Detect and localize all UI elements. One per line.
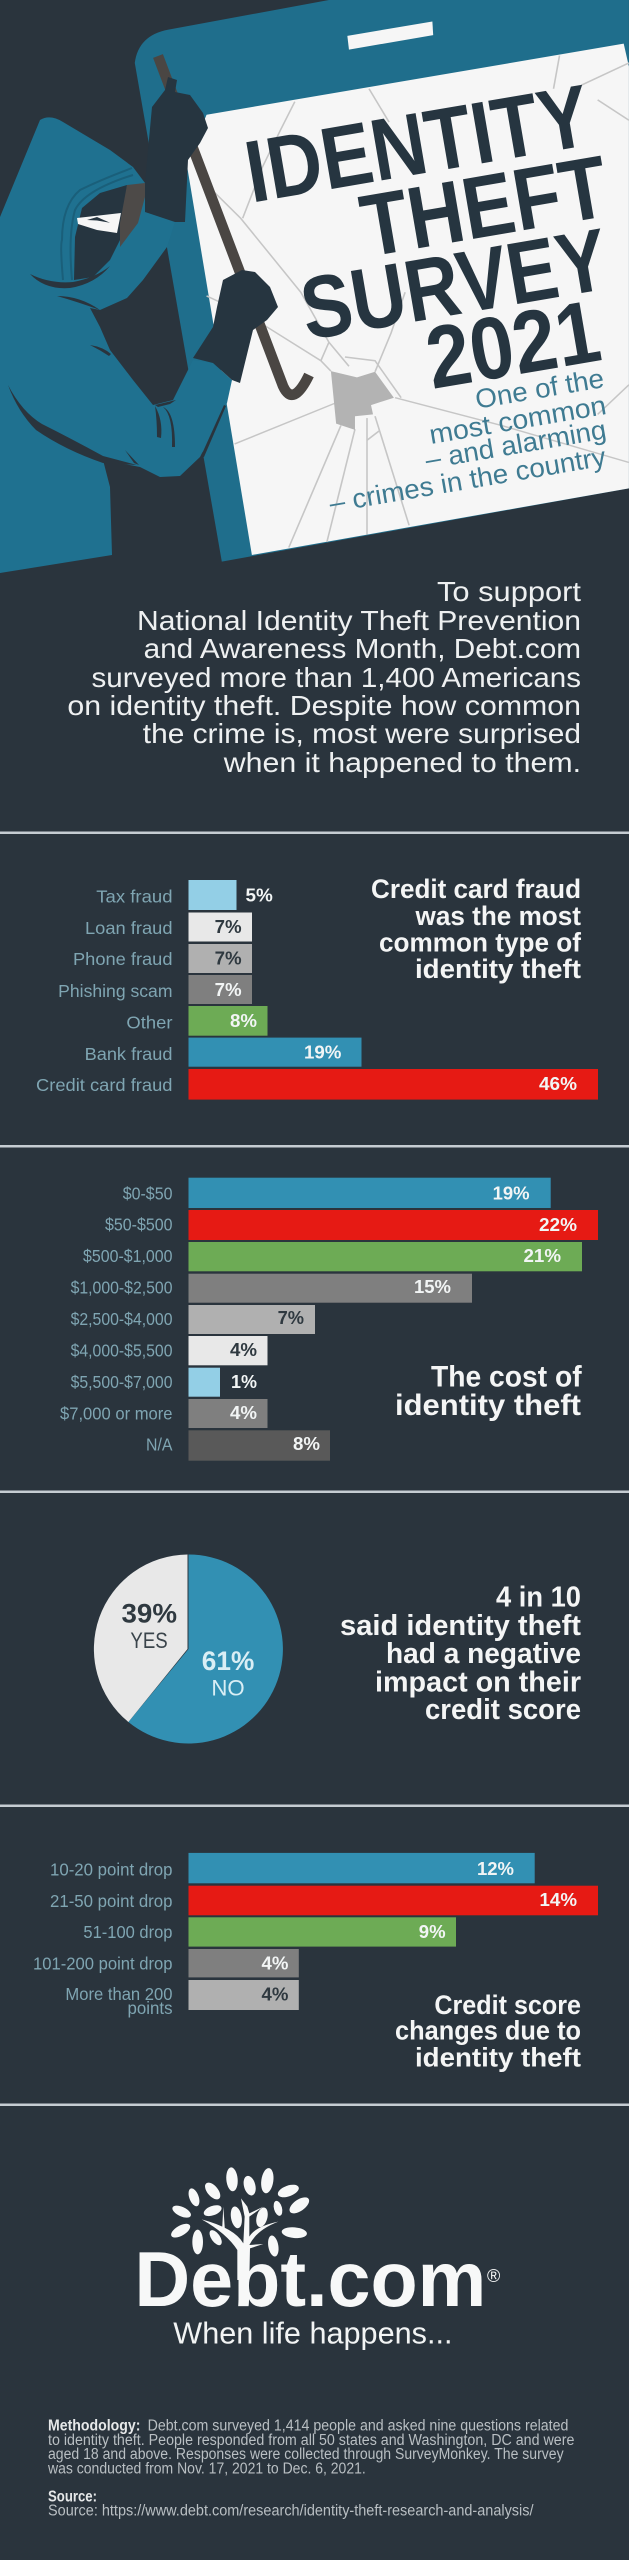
bar: 101-200 point drop 4% xyxy=(33,1949,299,1977)
bar: credit card fraud 46% xyxy=(36,1069,598,1100)
heading: the cost of identity theft xyxy=(395,1361,583,1422)
intro text: the crime is, most were surprised xyxy=(143,718,581,749)
bar: $50-$500 22%: $50-$500 xyxy=(105,1215,173,1235)
bar: N/A 8% xyxy=(146,1430,330,1461)
bar: bank fraud 19%: Bank fraud xyxy=(85,1044,172,1064)
screen cracks xyxy=(207,55,629,548)
heading: credit card fraud: identity theft xyxy=(415,954,581,984)
phone body xyxy=(135,0,629,562)
bar: loan fraud 7%: 7% xyxy=(215,916,242,937)
bar: other 8% xyxy=(126,1006,268,1036)
panel: type of identity theft xyxy=(36,874,598,1100)
bar: $5,500-$7,000 1% xyxy=(71,1368,257,1397)
heading: credit card fraud: was the most xyxy=(415,901,581,931)
hood inner lining xyxy=(120,183,145,247)
methodology: Debt.com surveyed 1,414 people and asked nine questions related xyxy=(148,2418,568,2435)
methodology: to identity theft. People responded from all 50 states and Washington, DC and were xyxy=(48,2432,574,2449)
bar: $500-$1,000 21% xyxy=(83,1242,582,1271)
heading: credit score changes xyxy=(395,1990,581,2072)
bar: loan fraud 7%: Loan fraud xyxy=(85,918,172,938)
phone screen xyxy=(187,44,629,555)
bar: $500-$1,000 21%: $500-$1,000 xyxy=(83,1246,173,1266)
bar: phishing scam 7%: 7% xyxy=(215,979,242,1000)
bar: $2,500-$4,000 7% xyxy=(71,1305,315,1334)
bar: 21-50 point drop 14%: 21-50 point drop xyxy=(50,1891,172,1911)
heading: 4 in 10 xyxy=(340,1582,581,1726)
panel: footer xyxy=(47,2167,574,2520)
methodology: was conducted from Nov. 17, 2021 to Dec. 6, 2021. xyxy=(47,2460,366,2477)
panel: credit score changes xyxy=(33,1853,598,2072)
lower glove xyxy=(193,270,278,383)
bar: phishing scam 7% xyxy=(58,975,252,1004)
bar: loan fraud 7% xyxy=(85,912,252,942)
heading: credit card fraud: common type of xyxy=(379,928,582,958)
bar: more than 200 points 4%: points xyxy=(128,1998,173,2018)
bar: $5,500-$7,000 1%: $5,500-$7,000 xyxy=(71,1372,173,1392)
heading: credit score changes: changes due to xyxy=(395,2016,581,2046)
bar: $1,000-$2,500 15% xyxy=(71,1274,472,1303)
source xyxy=(48,2489,534,2520)
heading: credit score changes: Credit score xyxy=(434,1990,581,2020)
bar: more than 200 points 4%: 4% xyxy=(262,1984,288,2005)
title: 2021 xyxy=(419,281,607,408)
bar: 51-100 drop 9%: 9% xyxy=(419,1921,446,1942)
subtitle: most common xyxy=(427,390,608,450)
pie label: no: NO xyxy=(211,1676,245,1700)
bar: $500-$1,000 21%: 21% xyxy=(524,1245,561,1266)
heading: 4 in 10: impact on their xyxy=(375,1666,581,1698)
screen hole xyxy=(331,371,394,430)
bar: credit card fraud 46%: 46% xyxy=(539,1073,577,1094)
bar: $50-$500 22% xyxy=(105,1210,598,1240)
phone speaker slot xyxy=(347,21,433,50)
bar: $1,000-$2,500 15%: $1,000-$2,500 xyxy=(71,1278,173,1298)
illustration: broken phone and thief xyxy=(0,0,629,573)
heading: credit card fraud: Credit card fraud xyxy=(371,874,581,904)
intro text: and Awareness Month, Debt.com xyxy=(144,633,581,664)
bar: $2,500-$4,000 7%: $2,500-$4,000 xyxy=(71,1309,173,1329)
bar: more than 200 points 4%: More than 200 xyxy=(65,1984,173,2004)
bar: 10-20 point drop 12%: 10-20 point drop xyxy=(50,1859,172,1879)
heading: the cost of identity theft: identity theft xyxy=(395,1389,581,1422)
bar: phone fraud 7%: Phone fraud xyxy=(73,949,172,969)
heading: 4 in 10: said identity theft xyxy=(340,1610,581,1642)
intro text xyxy=(67,576,581,778)
pie chart xyxy=(94,1554,283,1743)
source: Source: https://www.debt.com/research/identity-theft-research-and-analysis/ xyxy=(48,2503,534,2520)
upper glove xyxy=(145,77,208,222)
tagline: When life happens... xyxy=(173,2315,453,2350)
bar: $5,500-$7,000 1%: 1% xyxy=(231,1371,257,1392)
bar: phone fraud 7% xyxy=(73,944,252,973)
bar: $1,000-$2,500 15%: 15% xyxy=(414,1276,451,1297)
bar: $7,000 or more 4% xyxy=(60,1399,268,1428)
heading: 4 in 10: had a negative xyxy=(386,1638,581,1670)
intro text: surveyed more than 1,400 Americans xyxy=(92,662,581,693)
bar: $0-$50 19%: 19% xyxy=(493,1182,530,1203)
icon: tree xyxy=(169,2167,312,2280)
bar: other 8%: 8% xyxy=(230,1010,257,1031)
bar: 10-20 point drop 12%: 12% xyxy=(477,1858,514,1879)
bar: N/A 8%: 8% xyxy=(293,1433,320,1454)
intro text: on identity theft. Despite how common xyxy=(67,690,581,721)
thief face mask xyxy=(74,185,127,280)
bar: $0-$50 19% xyxy=(123,1178,551,1208)
heading: the cost of identity theft: The cost of xyxy=(431,1361,583,1394)
bar: 21-50 point drop 14%: 14% xyxy=(540,1889,577,1910)
pie label: yes: YES xyxy=(130,1628,168,1653)
bar: 10-20 point drop 12% xyxy=(50,1853,535,1883)
eye slit xyxy=(87,217,110,223)
bar: tax fraud 5%: 5% xyxy=(246,884,273,905)
subtitle xyxy=(327,363,609,518)
bar: bank fraud 19%: 19% xyxy=(304,1042,341,1063)
methodology: Methodology: xyxy=(48,2418,140,2435)
intro text: To support xyxy=(437,576,581,607)
bar: 51-100 drop 9% xyxy=(83,1917,456,1947)
crowbar xyxy=(158,56,309,395)
methodology: aged 18 and above. Responses were collected through SurveyMonkey. The survey xyxy=(48,2446,564,2463)
subtitle: One of the xyxy=(473,363,606,415)
bar: tax fraud 5%: Tax fraud xyxy=(96,886,172,906)
bar: 21-50 point drop 14% xyxy=(50,1886,598,1915)
bar: other 8%: Other xyxy=(126,1012,173,1032)
pie label: yes: 39% xyxy=(122,1598,177,1628)
intro text: National Identity Theft Prevention xyxy=(137,605,581,636)
bar: $4,000-$5,500 4% xyxy=(71,1336,267,1365)
intro text: when it happened to them. xyxy=(223,747,581,778)
bar: $7,000 or more 4%: $7,000 or more xyxy=(60,1403,172,1423)
pie label: no: 61% xyxy=(202,1646,254,1676)
panel: cost of identity theft xyxy=(60,1178,598,1461)
heading: credit card fraud xyxy=(371,874,582,984)
bar: bank fraud 19% xyxy=(85,1038,361,1067)
bar: credit card fraud 46%: Credit card fraud xyxy=(36,1075,172,1095)
methodology xyxy=(47,2418,574,2477)
subtitle: – crimes in the country xyxy=(327,441,609,518)
logo xyxy=(134,2167,500,2323)
thief body xyxy=(0,117,232,573)
bar: 101-200 point drop 4%: 4% xyxy=(262,1952,288,1974)
bar: more than 200 points 4% xyxy=(65,1980,299,2018)
clothing folds xyxy=(8,266,226,465)
thief eye xyxy=(77,213,121,233)
bar: $4,000-$5,500 4%: $4,000-$5,500 xyxy=(71,1341,173,1361)
subtitle: – and alarming xyxy=(423,415,608,475)
bar: N/A 8%: N/A xyxy=(146,1435,173,1455)
bar: 51-100 drop 9%: 51-100 drop xyxy=(83,1922,172,1942)
heading: 4 in 10: credit score xyxy=(425,1694,581,1726)
bar: $2,500-$4,000 7%: 7% xyxy=(278,1307,304,1328)
heading: credit score changes: identity theft xyxy=(415,2042,581,2072)
pie slice: yes 39% xyxy=(94,1554,188,1722)
pie label: yes xyxy=(122,1598,177,1653)
logo: ® xyxy=(487,2266,500,2286)
source: Source: xyxy=(48,2489,97,2506)
title xyxy=(238,65,615,408)
bar: $4,000-$5,500 4%: 4% xyxy=(230,1339,257,1360)
panel: hero xyxy=(0,0,629,573)
hood seams xyxy=(61,168,133,280)
phone xyxy=(135,0,629,562)
bar: $50-$500 22%: 22% xyxy=(539,1214,577,1235)
logo: Debt.com xyxy=(134,2235,486,2323)
bar: 101-200 point drop 4%: 101-200 point drop xyxy=(33,1954,172,1974)
bar: $7,000 or more 4%: 4% xyxy=(230,1402,257,1423)
bar: $0-$50 19%: $0-$50 xyxy=(123,1183,173,1203)
bar: phishing scam 7%: Phishing scam xyxy=(58,981,173,1001)
panel: credit score impact xyxy=(94,1554,581,1743)
pie slice: no 61% xyxy=(128,1554,283,1743)
bar: phone fraud 7%: 7% xyxy=(215,948,242,968)
heading: 4 in 10: 4 in 10 xyxy=(496,1582,581,1614)
bar: tax fraud 5% xyxy=(96,880,273,910)
pie label: no xyxy=(202,1646,254,1700)
